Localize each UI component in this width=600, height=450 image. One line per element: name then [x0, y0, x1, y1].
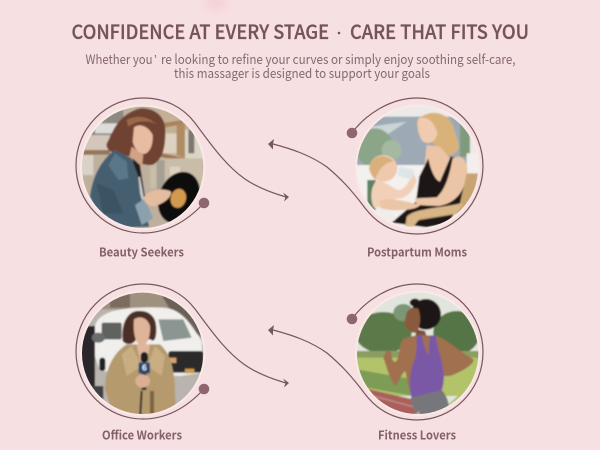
dot — [199, 384, 209, 394]
outline with arrow — [273, 284, 483, 420]
subtitle — [86, 49, 516, 82]
subtitle: this massager is designed to support your goals — [174, 63, 430, 82]
subtitle: Whether you — [86, 49, 152, 68]
photo: mother feeding baby — [355, 105, 480, 230]
outline with arrow — [76, 98, 286, 233]
outline with arrow — [273, 98, 483, 234]
label: Postpartum Moms — [367, 244, 467, 260]
label: Beauty Seekers — [99, 244, 184, 260]
label: Office Workers — [102, 426, 182, 444]
photo: reporter in trench coat — [80, 291, 205, 416]
photo: woman running on track — [355, 291, 480, 416]
dot — [347, 314, 357, 324]
title: CONFIDENCE AT EVERY STAGE — [72, 16, 329, 45]
panel: fitness lovers — [268, 284, 487, 444]
panel: beauty seekers — [76, 98, 289, 260]
label: Fitness Lovers — [378, 426, 456, 444]
arrowhead — [283, 378, 289, 388]
arrowhead — [268, 139, 274, 150]
photo: woman holding vinyl record — [77, 103, 210, 233]
title — [72, 16, 529, 45]
arrowhead — [283, 192, 289, 202]
panel: postpartum moms — [268, 98, 487, 260]
title: CARE THAT FITS YOU — [350, 16, 529, 45]
arrowhead — [268, 325, 274, 336]
subtitle: ’ — [154, 52, 157, 67]
dot — [347, 128, 357, 138]
outline with arrow — [76, 284, 286, 419]
subtitle: re looking to refine your curves or simply enjoy soothing self-care, — [161, 49, 516, 68]
photo: reporter in trench coat: 6 — [142, 363, 147, 374]
dot — [199, 198, 209, 208]
panel: office workers — [76, 284, 289, 444]
